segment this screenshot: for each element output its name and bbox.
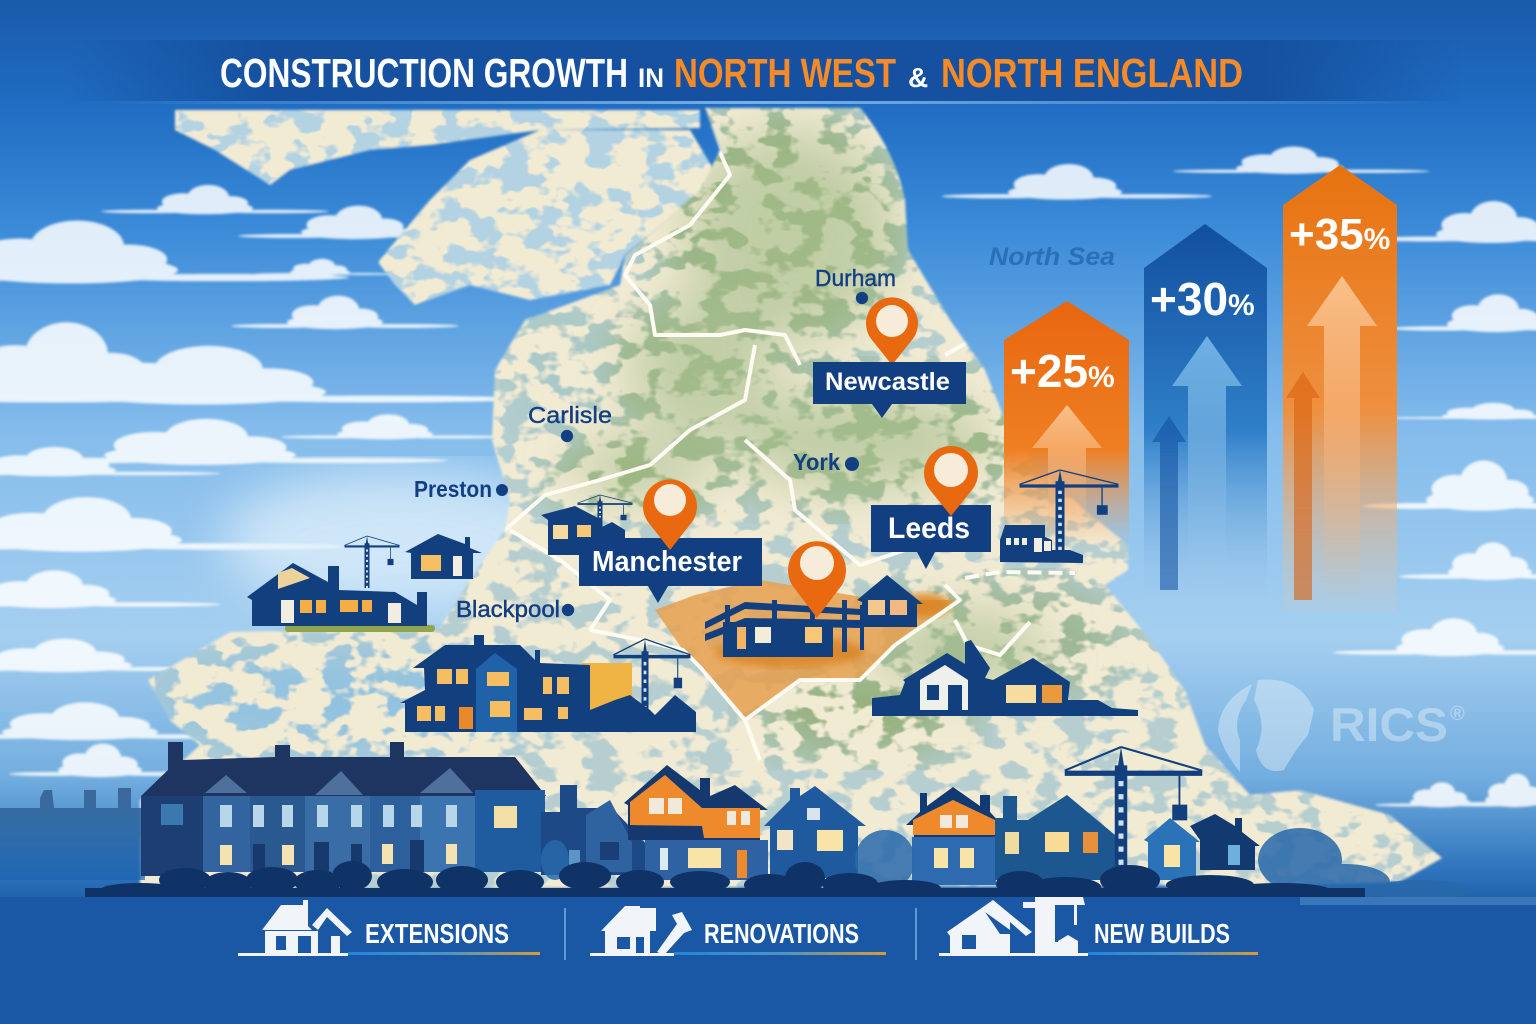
title text: & [908,62,928,93]
legend: Renovations [590,906,886,956]
bar: +30%: +30% [1150,273,1255,325]
city: Blackpool: Blackpool [456,596,560,622]
town skyline [141,742,1260,885]
bottom band [0,897,1536,1024]
RICS logo: RICS [1330,698,1448,751]
label: Leeds: Leeds [888,512,970,545]
bar: +35%: +35% [1289,210,1390,259]
bar: +35% [1283,165,1397,612]
green tint over the north [570,130,1050,690]
label: Leeds [871,505,991,569]
house cluster: south Manchester [400,635,696,732]
title text [220,50,1243,96]
map: land mass [138,106,1443,888]
title text: IN [638,63,664,93]
pale glow left of map [220,470,580,610]
legend: New Builds [939,897,1258,956]
label: North Sea: North Sea [989,243,1115,271]
map pin: centre [788,541,846,618]
city: Preston: Preston [414,476,492,502]
region boundary lines [505,125,1075,760]
bar: +30% [1144,224,1267,600]
label: Newcastle [813,362,966,418]
distant terrace on the left [0,788,145,880]
RICS logo: ® [1450,703,1465,725]
tree line [85,828,1470,900]
RICS logo [1218,680,1465,772]
house cluster: west coast [247,534,482,632]
label: Newcastle: Newcastle [825,368,950,396]
city: Carlisle [528,402,612,442]
clouds [0,147,1536,807]
city: Durham: Durham [815,265,896,291]
title text: NORTH WEST [674,50,896,96]
legend: Extensions [238,900,540,956]
divider [564,908,566,960]
title text: NORTH ENGLAND [941,50,1243,96]
divider [915,908,917,960]
map pin: Manchester [643,479,697,550]
house cluster: centre build [705,575,923,657]
city: York: York [793,449,840,475]
orange growth region [655,580,960,720]
house cluster: east coast [1000,470,1118,563]
bar: +25%: +25% [1010,345,1115,397]
legend: Extensions: EXTENSIONS [365,918,509,949]
house cluster: south east [872,640,1138,716]
city: Carlisle: Carlisle [528,402,612,428]
label: Manchester [579,538,762,603]
house cluster: near Manchester [541,495,632,555]
map pin: Newcastle [866,297,918,365]
title text: CONSTRUCTION GROWTH [220,50,628,96]
legend: New Builds: NEW BUILDS [1094,918,1230,949]
label: Manchester: Manchester [592,546,742,578]
legend: Renovations: RENOVATIONS [704,918,859,949]
bar: +25% [1004,301,1129,548]
title band [70,40,1460,104]
map pin: Leeds [924,446,978,516]
city: Durham [815,265,896,304]
